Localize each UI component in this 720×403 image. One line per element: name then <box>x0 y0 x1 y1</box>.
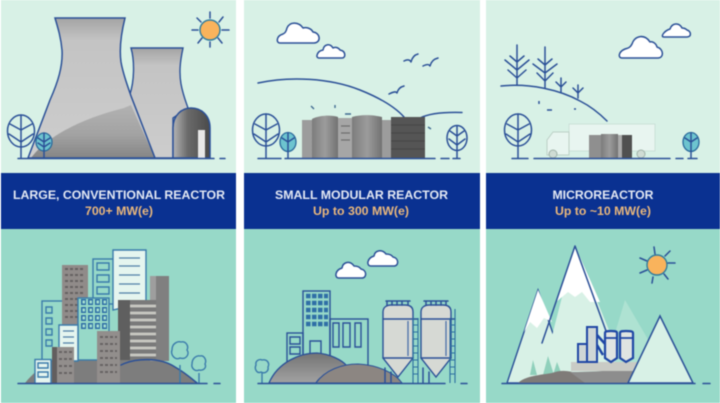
heading: MICROREACTOR <box>552 188 654 202</box>
second cooling tower <box>130 48 188 158</box>
ground line <box>512 158 697 160</box>
factory buildings <box>287 291 368 369</box>
ground line <box>18 382 220 384</box>
banner: small modular reactor <box>244 173 480 229</box>
icon: cloud <box>619 37 662 58</box>
icon: cloud <box>277 23 319 43</box>
icon: tree <box>192 356 206 383</box>
background <box>244 229 480 403</box>
hill outline <box>121 360 197 383</box>
icon: tree <box>255 360 269 383</box>
heading: SMALL MODULAR REACTOR <box>275 188 448 202</box>
icon: small teal tree <box>280 132 296 158</box>
micro reactor module <box>589 134 632 158</box>
panel: mountains <box>486 229 720 403</box>
ground line <box>18 158 225 160</box>
truck <box>547 124 655 158</box>
background <box>486 229 720 403</box>
heading: LARGE, CONVENTIONAL REACTOR <box>13 188 225 202</box>
front grey tower <box>52 347 74 383</box>
banner: microreactor <box>486 173 720 229</box>
sky background <box>1 0 236 173</box>
capacity: Up to ~10 MW(e) <box>555 204 651 218</box>
panel: small modular reactor <box>244 0 480 173</box>
modular reactor building <box>302 105 431 158</box>
panel: microreactor <box>486 0 720 173</box>
striped grey tower <box>118 300 156 360</box>
icon: right tree <box>447 126 467 158</box>
back mountain <box>600 300 660 383</box>
grey tower <box>62 265 88 330</box>
hill <box>25 348 197 383</box>
icon: cloud <box>336 262 366 278</box>
icon: small teal tree <box>683 132 699 158</box>
panel: industry <box>244 229 480 403</box>
ground line <box>258 158 460 160</box>
capacity: Up to 300 MW(e) <box>313 204 409 218</box>
icon: cloud <box>368 251 398 266</box>
icon: tree <box>172 342 188 383</box>
light low building <box>59 325 78 361</box>
sky background <box>486 0 720 173</box>
hill line <box>501 85 607 121</box>
icon: birds <box>389 54 438 94</box>
icon: cloud <box>317 45 345 58</box>
dark grey block <box>150 276 169 361</box>
left mountain <box>507 290 570 383</box>
banner: large conventional reactor <box>1 173 236 229</box>
micro plant and silos <box>578 327 633 362</box>
small front building <box>35 360 51 384</box>
tower outline upper <box>93 259 114 304</box>
icon: sun <box>640 247 675 283</box>
containment dome <box>173 108 210 158</box>
hill lines <box>258 79 462 118</box>
icon: sun <box>192 12 229 47</box>
panel: city <box>1 229 236 403</box>
silo right <box>421 301 455 383</box>
ground line <box>502 382 710 384</box>
icon: large tree <box>8 115 34 158</box>
icon: small pines <box>530 356 562 375</box>
icon: cloud <box>662 24 690 37</box>
sky background <box>244 0 480 173</box>
silo left <box>383 301 418 383</box>
ground line <box>258 382 467 384</box>
plant platform <box>571 362 637 371</box>
icon: large tree <box>504 114 532 158</box>
light office tower <box>113 250 146 310</box>
background <box>1 229 236 403</box>
mid grey tower <box>97 331 120 383</box>
icon: small teal tree <box>36 133 52 158</box>
icon: pine trees <box>505 45 583 110</box>
large cooling tower <box>28 18 155 158</box>
panel: large conventional reactor <box>1 0 236 173</box>
capacity: 700+ MW(e) <box>85 206 153 218</box>
grey mounds <box>269 353 402 383</box>
tower outline left <box>42 301 64 361</box>
grey hills <box>518 368 636 383</box>
middle mountain <box>540 246 615 383</box>
right mountain <box>628 316 693 383</box>
windowed building <box>78 298 109 360</box>
icon: large tree <box>252 114 280 158</box>
